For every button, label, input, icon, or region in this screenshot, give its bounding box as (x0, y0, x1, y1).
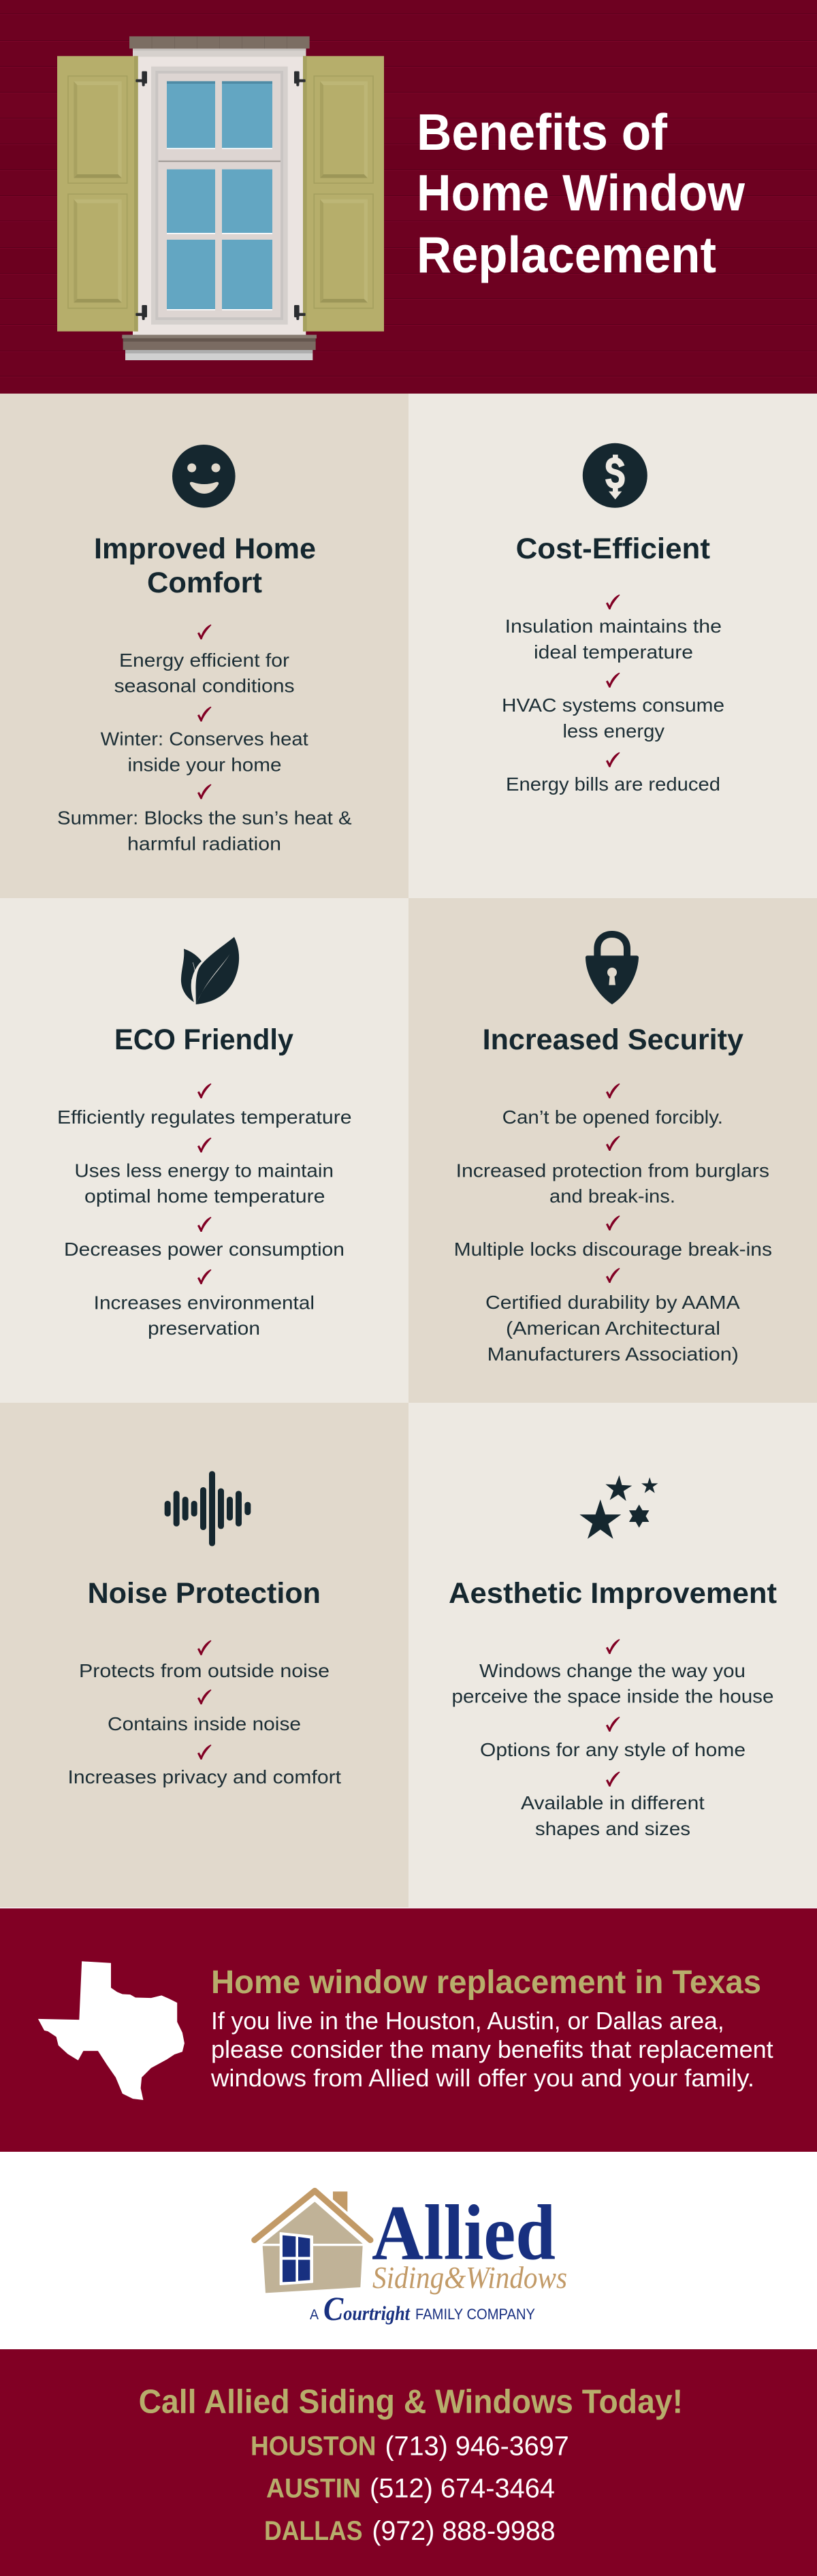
phone: houston: (713) 946-3697 (385, 2432, 569, 2462)
logo: allied siding and windows: Courtright (323, 2289, 411, 2327)
checklist: increased security: Increased protection from burglars (456, 1160, 769, 1181)
panel: cost-efficient (408, 394, 817, 898)
checklist: noise protection (68, 1640, 341, 1787)
panel: texas banner (0, 1908, 817, 2152)
checklist: improved home comfort: harmful radiation (127, 833, 281, 855)
checklist: aesthetic improvement (452, 1639, 773, 1839)
checklist: increased security: Certified durability by AAMA (485, 1292, 740, 1313)
checklist: noise protection: Increases privacy and comfort (68, 1766, 341, 1787)
title (417, 104, 746, 283)
checklist: improved home comfort: inside your home (128, 754, 282, 776)
checklist: cost-efficient (502, 594, 724, 795)
checklist: cost-efficient: ideal temperature (534, 641, 693, 663)
logo: allied siding and windows (255, 2190, 567, 2327)
phone: houston (251, 2432, 569, 2462)
logo: allied siding and windows: Allied (372, 2190, 556, 2277)
checklist: cost-efficient: Insulation maintains the (505, 616, 722, 637)
icon: smiley face (172, 445, 236, 508)
checklist: eco friendly: Increases environmental (94, 1292, 315, 1313)
icon: sound wave (165, 1471, 251, 1546)
logo: allied siding and windows: Siding&Windows (372, 2260, 567, 2295)
icon: leaves (181, 937, 239, 1004)
checklist: eco friendly: Uses less energy to maintain (74, 1160, 334, 1181)
text block: texas description (210, 2007, 773, 2092)
phone: dallas: (972) 888-9988 (372, 2516, 556, 2546)
checklist: noise protection: Contains inside noise (108, 1713, 301, 1734)
checklist: improved home comfort: Energy efficient for (119, 650, 289, 671)
checklist: improved home comfort: Summer: Blocks the sun’s heat & (57, 808, 352, 829)
checklist: cost-efficient: HVAC systems consume (502, 695, 724, 716)
heading: improved home comfort (94, 532, 316, 599)
illustration: window with shutters (57, 36, 384, 360)
checklist: increased security: and break-ins. (549, 1186, 675, 1207)
icon: texas map (38, 1961, 185, 2100)
phone: austin: (512) 674-3464 (370, 2474, 555, 2504)
checklist: increased security: (American Architectural (506, 1318, 720, 1339)
checklist: eco friendly: preservation (148, 1318, 260, 1339)
phone: dallas: DALLAS (264, 2516, 363, 2546)
checklist: aesthetic improvement: Available in different (521, 1792, 705, 1813)
title: Home Window (417, 164, 746, 221)
panel: aesthetic improvement (408, 1403, 817, 1907)
heading: aesthetic improvement: Aesthetic Improvement (449, 1577, 777, 1610)
text block: texas description: windows from Allied will offer you and your family. (210, 2064, 754, 2092)
checklist: aesthetic improvement: Options for any style of home (480, 1739, 746, 1760)
checklist: increased security (454, 1083, 772, 1365)
checklist: aesthetic improvement: perceive the space inside the house (452, 1686, 773, 1707)
logo: allied siding and windows: FAMILY COMPANY (415, 2306, 535, 2323)
checklist: improved home comfort: Winter: Conserves heat (101, 729, 308, 750)
phone: austin: AUSTIN (266, 2474, 361, 2504)
panel: noise protection (0, 1403, 408, 1907)
phone: houston: HOUSTON (251, 2432, 376, 2462)
icon: padlock (586, 934, 639, 1004)
checklist: eco friendly: optimal home temperature (84, 1186, 325, 1207)
checklist: eco friendly: Decreases power consumption (64, 1239, 345, 1260)
heading: home window replacement in texas: Home window replacement in Texas (211, 1965, 761, 2001)
logo: allied siding and windows: A (310, 2307, 319, 2323)
panel: eco friendly (0, 898, 408, 1403)
checklist: increased security: Multiple locks discourage break-ins (454, 1239, 772, 1260)
title: Benefits of (417, 104, 668, 161)
checklist: eco friendly: Efficiently regulates temperature (57, 1107, 352, 1128)
panel: increased security (408, 898, 817, 1403)
checklist: aesthetic improvement: shapes and sizes (535, 1818, 690, 1839)
icon: stars (579, 1475, 658, 1539)
title: Replacement (417, 226, 716, 283)
header panel (0, 0, 817, 394)
checklist: aesthetic improvement: Windows change the way you (479, 1660, 746, 1681)
checklist: eco friendly (57, 1083, 352, 1339)
phone: dallas (264, 2516, 556, 2546)
checklist: increased security: Manufacturers Association) (487, 1343, 739, 1365)
heading: improved home comfort: Improved Home (94, 532, 316, 565)
panel: improved home comfort (0, 394, 408, 898)
heading: eco friendly: ECO Friendly (114, 1023, 293, 1056)
heading: improved home comfort: Comfort (147, 567, 262, 599)
checklist: improved home comfort: seasonal conditions (114, 675, 295, 696)
panel: call to action footer (0, 2349, 817, 2576)
checklist: cost-efficient: Energy bills are reduced (506, 774, 720, 795)
heading: call allied today: Call Allied Siding & Windows Today! (139, 2384, 683, 2421)
checklist: cost-efficient: less energy (562, 720, 664, 742)
heading: cost-efficient: Cost-Efficient (516, 532, 710, 565)
checklist: increased security: Can’t be opened forcibly. (502, 1107, 723, 1128)
heading: noise protection: Noise Protection (88, 1577, 321, 1610)
text block: texas description: If you live in the Houston, Austin, or Dallas area, (211, 2007, 724, 2035)
heading: increased security: Increased Security (483, 1023, 743, 1056)
text block: texas description: please consider the many benefits that replacement (211, 2035, 773, 2063)
icon: dollar with down arrow (583, 443, 647, 508)
phone: austin (266, 2474, 555, 2504)
checklist: improved home comfort (57, 624, 352, 855)
checklist: noise protection: Protects from outside noise (79, 1660, 330, 1681)
